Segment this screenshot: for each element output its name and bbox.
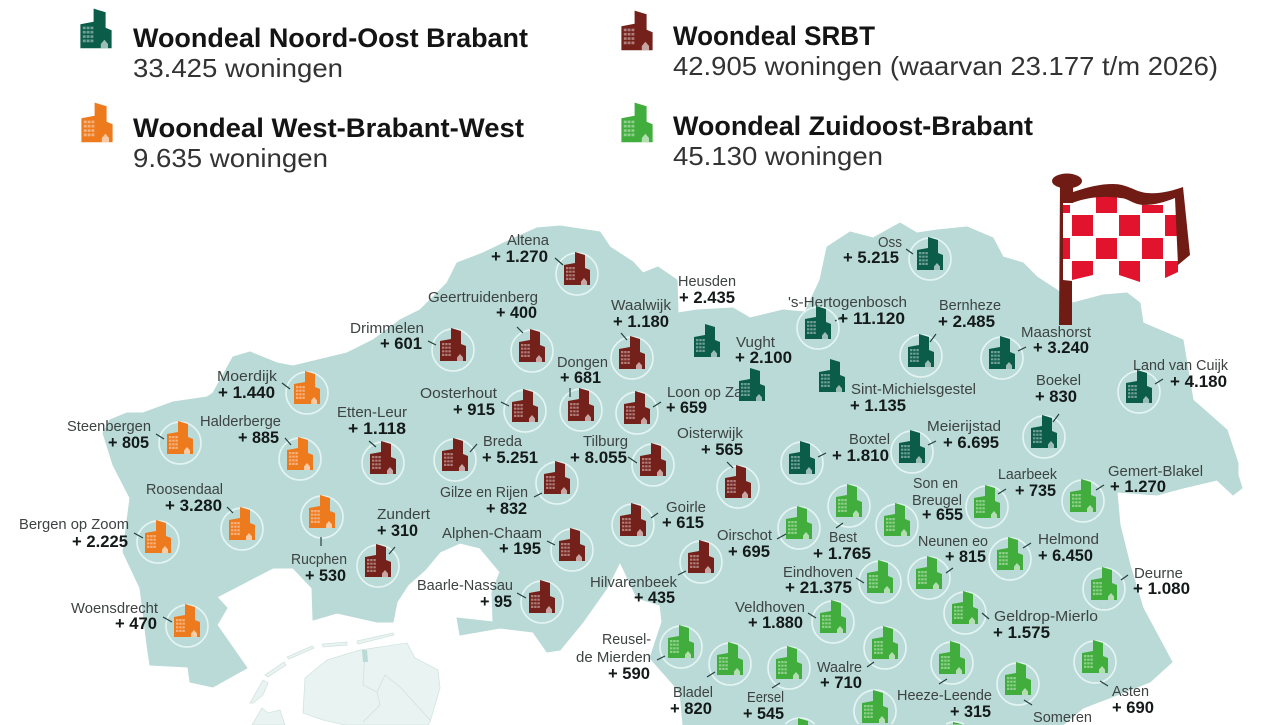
icon: Etten-Leur xyxy=(362,441,404,484)
icon: Rucphen xyxy=(301,495,343,538)
label: Oirschot: + 695 xyxy=(728,543,770,561)
label: Altena xyxy=(491,233,550,266)
label: 's-Hertogenbosch: + 11.120 xyxy=(838,310,905,328)
municipality: Meierijstad xyxy=(891,419,1001,473)
label: Heusden: + 2.435 xyxy=(679,289,735,307)
label: Gemert-Blakel xyxy=(1108,464,1203,496)
label: Laarbeek: + 735 xyxy=(1015,482,1056,500)
label: Oss: Oss xyxy=(878,235,902,251)
icon: Meierijstad xyxy=(891,430,933,473)
municipality: Land van Cuijk xyxy=(1118,358,1229,413)
municipality: Geldrop-Mierlo xyxy=(944,591,1098,642)
municipality: Bernheze xyxy=(900,298,1001,377)
label: Maashorst: Maashorst xyxy=(1021,325,1091,341)
label: Heeze-Leende: + 315 xyxy=(950,703,991,721)
label: Laarbeek xyxy=(998,467,1058,500)
municipality: Drimmelen xyxy=(350,321,474,371)
icon: Moerdijk xyxy=(286,371,328,414)
icon: Zuidoost-Brabant building xyxy=(621,103,653,142)
municipality: Vught xyxy=(735,335,792,401)
icon: Eindhoven xyxy=(859,560,901,603)
icon: Oirschot xyxy=(778,506,820,549)
icon: Laarbeek xyxy=(966,485,1008,528)
municipality: Zundert xyxy=(357,507,430,587)
municipality: Woensdrecht xyxy=(71,601,208,647)
legend: Woondeal Noord-Oost Brabant: 33.425 woningen xyxy=(133,53,343,83)
icon: 's-Hertogenbosch xyxy=(797,306,839,349)
municipality: Geertruidenberg xyxy=(428,290,553,372)
municipality: Gemert-Blakel xyxy=(1062,464,1203,522)
label: Helmond: + 6.450 xyxy=(1038,547,1093,565)
icon: Roosendaal xyxy=(221,507,263,550)
label: Etten-Leur: + 1.118 xyxy=(348,420,406,438)
label: Deurne: + 1.080 xyxy=(1133,580,1190,598)
label: Vught xyxy=(735,335,792,367)
municipality: Oirschot xyxy=(717,506,820,561)
legend: Woondeal SRBT xyxy=(621,11,1218,81)
label: Helmond: Helmond xyxy=(1038,532,1099,548)
label: Rucphen: + 530 xyxy=(305,567,346,585)
municipality: Goirle xyxy=(612,500,706,546)
label: Roosendaal xyxy=(146,482,223,515)
label: Vught: Vught xyxy=(736,335,775,351)
label: Bergen op Zoom: + 2.225 xyxy=(72,533,128,551)
label: Maashorst: + 3.240 xyxy=(1033,339,1089,357)
icon: Bernheze xyxy=(900,334,942,377)
icon: Bladel xyxy=(709,642,751,685)
icon: Oisterwijk xyxy=(717,465,759,508)
label: Loon op Zand xyxy=(666,385,759,417)
label: Son en Breugel: Breugel xyxy=(912,493,962,509)
label: Alphen-Chaam: + 195 xyxy=(499,540,541,558)
icon: Heusden xyxy=(694,324,720,357)
label: Neunen eo: Neunen eo xyxy=(918,534,988,550)
label: Oirschot: Oirschot xyxy=(717,528,772,544)
municipality: Oosterhout xyxy=(420,386,546,432)
label: Baarle-Nassau: Baarle-Nassau xyxy=(417,578,513,594)
icon: Altena xyxy=(556,252,598,295)
label: Geertruidenberg: Geertruidenberg xyxy=(428,290,538,306)
icon: Noord-Oost Brabant building xyxy=(80,9,112,48)
label: Boekel xyxy=(1035,373,1081,406)
municipality: Loon op Zand xyxy=(616,385,759,434)
label: Rucphen xyxy=(291,552,347,585)
icon: Waalre xyxy=(864,626,906,669)
municipality: Roosendaal xyxy=(146,482,263,550)
municipality: Gilze en Rijen xyxy=(440,461,578,518)
label: Oisterwijk: Oisterwijk xyxy=(677,426,744,442)
label: Drimmelen: Drimmelen xyxy=(350,321,424,337)
label: Geldrop-Mierlo xyxy=(993,609,1098,642)
icon: Halderberge xyxy=(279,437,321,480)
municipality: Deurne xyxy=(1083,566,1190,610)
label: Neunen eo xyxy=(918,534,988,566)
label: Breda: Breda xyxy=(483,434,523,450)
label: Bladel: Bladel xyxy=(673,685,713,701)
municipality: Heeze-Leende xyxy=(897,641,992,721)
label: Zundert: + 310 xyxy=(377,522,418,540)
label: Oisterwijk xyxy=(677,426,744,459)
label: Gilze en Rijen: Gilze en Rijen xyxy=(440,485,528,501)
label: Meierijstad xyxy=(927,419,1001,452)
label: Alphen-Chaam xyxy=(442,526,542,558)
label: Sint-Michielsgestel: + 1.135 xyxy=(850,397,906,415)
label: Tilburg: + 8.055 xyxy=(570,449,627,467)
municipality: Baarle-Nassau xyxy=(417,578,563,623)
municipality: Helmond xyxy=(989,532,1099,580)
icon: Reusel-de Mierden xyxy=(660,625,702,668)
icon: Breda xyxy=(434,438,476,481)
municipality: Oss xyxy=(843,235,951,280)
label: Heusden xyxy=(678,274,736,307)
label: Eersel: + 545 xyxy=(743,705,784,723)
municipality: Asten xyxy=(1074,640,1154,717)
label: Reusel-de Mierden: de Mierden xyxy=(576,650,651,666)
label: Land van Cuijk: + 4.180 xyxy=(1170,373,1227,391)
label: Goirle: Goirle xyxy=(666,500,706,516)
label: Woensdrecht xyxy=(71,601,158,633)
label: Meierijstad: + 6.695 xyxy=(943,434,999,452)
municipality: Bladel xyxy=(670,642,751,718)
legend: Woondeal Zuidoost-Brabant: Woondeal Zuidoost-Brabant xyxy=(673,111,1033,141)
icon: Eersel xyxy=(768,646,810,689)
icon: Brabant flag xyxy=(1052,174,1190,325)
label: Alphen-Chaam: Alphen-Chaam xyxy=(442,526,542,542)
label: Goirle: + 615 xyxy=(662,514,704,532)
municipality: Eindhoven xyxy=(783,560,901,603)
label: Asten xyxy=(1112,684,1154,717)
icon: Bergen op Zoom xyxy=(137,520,179,563)
label: Moerdijk: Moerdijk xyxy=(217,369,278,385)
icon: Son en Breugel xyxy=(876,503,918,546)
legend: Woondeal SRBT: Woondeal SRBT xyxy=(673,21,875,51)
label: Waalwijk xyxy=(611,298,672,331)
label: Hilvarenbeek: Hilvarenbeek xyxy=(590,575,678,591)
label: Maashorst xyxy=(1021,325,1091,357)
label: Roosendaal: + 3.280 xyxy=(165,497,222,515)
label: Loon op Zand: + 659 xyxy=(666,399,707,417)
label: Reusel-de Mierden xyxy=(576,632,651,683)
municipality: Altena xyxy=(491,233,598,295)
label: Eindhoven xyxy=(783,565,853,597)
label: Breda xyxy=(482,434,538,467)
label: Gilze en Rijen: + 832 xyxy=(486,500,527,518)
label: Dongen xyxy=(557,355,608,387)
label: Moerdijk xyxy=(217,369,278,402)
label: Son en Breugel: + 655 xyxy=(922,506,963,524)
label: Gemert-Blakel: + 1.270 xyxy=(1110,478,1166,496)
label: Waalwijk: Waalwijk xyxy=(611,298,672,314)
label: Land van Cuijk xyxy=(1133,358,1229,391)
label: Etten-Leur: Etten-Leur xyxy=(337,405,407,421)
icon: Geldrop-Mierlo xyxy=(944,591,986,634)
label: Woensdrecht: Woensdrecht xyxy=(71,601,158,617)
label: Boxtel: Boxtel xyxy=(849,432,890,448)
label: Altena: Altena xyxy=(507,233,550,249)
municipality: Maashorst xyxy=(981,325,1091,379)
label: Asten: Asten xyxy=(1112,684,1149,700)
icon: Maashorst xyxy=(981,336,1023,379)
legend: Woondeal Zuidoost-Brabant: 45.130 woningen xyxy=(673,141,883,171)
label: Bladel: + 820 xyxy=(670,700,712,718)
icon: Steenbergen xyxy=(159,421,201,464)
municipality: Waalre xyxy=(817,626,906,692)
label: Roosendaal: Roosendaal xyxy=(146,482,223,498)
municipality: Waalwijk xyxy=(611,298,672,379)
label: Geldrop-Mierlo: + 1.575 xyxy=(993,624,1050,642)
municipality: Rucphen xyxy=(291,495,347,585)
municipality: Laarbeek xyxy=(966,467,1058,528)
label: Oss xyxy=(843,235,902,267)
label: Baarle-Nassau: + 95 xyxy=(480,593,512,611)
icon: Land van Cuijk xyxy=(1118,370,1160,413)
legend: Woondeal Noord-Oost Brabant: Woondeal Noord-Oost Brabant xyxy=(133,23,528,53)
icon: Boekel xyxy=(1023,415,1065,458)
label: Asten: + 690 xyxy=(1112,699,1154,717)
label: Best: + 1.765 xyxy=(813,545,871,563)
icon: Asten xyxy=(1074,640,1116,683)
label: Bernheze xyxy=(938,298,1001,331)
icon: Tilburg xyxy=(632,443,674,486)
label: Deurne: Deurne xyxy=(1134,566,1183,582)
label: Deurne xyxy=(1133,566,1190,598)
municipality: Eersel xyxy=(743,646,810,723)
label: Waalre: + 710 xyxy=(820,674,862,692)
icon: Heeze-Leende xyxy=(931,641,973,684)
label: Halderberge: Halderberge xyxy=(200,414,281,430)
label: Oisterwijk: + 565 xyxy=(701,441,743,459)
label: Veldhoven xyxy=(735,600,805,632)
icon: Someren xyxy=(997,662,1039,705)
label: 's-Hertogenbosch: 's-Hertogenbosch xyxy=(788,295,907,311)
label: Heusden: Heusden xyxy=(678,274,736,290)
label: Best xyxy=(813,530,871,563)
label: Laarbeek: Laarbeek xyxy=(998,467,1058,483)
municipality: Tilburg xyxy=(570,434,674,486)
label: Son en Breugel: Son en xyxy=(913,476,958,492)
label: Neunen eo: + 815 xyxy=(945,548,986,566)
label: Bernheze: Bernheze xyxy=(939,298,1001,314)
label: Steenbergen xyxy=(67,419,151,452)
legend: Woondeal West-Brabant-West: Woondeal West-Brabant-West xyxy=(133,113,524,143)
label: Oirschot xyxy=(717,528,772,561)
label: Waalwijk: + 1.180 xyxy=(613,313,669,331)
municipality: Boekel xyxy=(1023,373,1081,458)
label: Oosterhout: + 915 xyxy=(453,401,495,419)
label: Reusel-de Mierden: + 590 xyxy=(608,665,650,683)
label: Drimmelen xyxy=(350,321,424,353)
label: Zundert: Zundert xyxy=(377,507,430,523)
municipality: 's-Hertogenbosch xyxy=(788,295,907,349)
icon: Hilvarenbeek xyxy=(680,540,722,583)
municipality: Halderberge xyxy=(200,414,321,480)
icon: Woensdrecht xyxy=(166,604,208,647)
municipality: Reusel-de Mierden xyxy=(576,625,702,683)
icon: Deurne xyxy=(1083,567,1125,610)
label: Waalre xyxy=(817,660,862,692)
icon: Gilze en Rijen xyxy=(536,461,578,504)
label: Drimmelen: + 601 xyxy=(380,335,422,353)
icon: West-Brabant-West building xyxy=(81,103,113,142)
label: Eindhoven: + 21.375 xyxy=(785,579,852,597)
municipality: Son en Breugel xyxy=(876,476,963,546)
label: Steenbergen: Steenbergen xyxy=(67,419,151,435)
label: Altena: + 1.270 xyxy=(491,248,548,266)
legend: Woondeal Zuidoost-Brabant xyxy=(621,103,1033,171)
icon: Neunen eo xyxy=(908,556,950,599)
icon: Vught xyxy=(739,368,765,401)
label: Bernheze: + 2.485 xyxy=(938,313,995,331)
icon: Loon op Zand xyxy=(616,391,658,434)
inset map: Netherlands xyxy=(250,633,440,725)
label: Sint-Michielsgestel xyxy=(850,382,976,415)
label: Oss: + 5.215 xyxy=(843,249,899,267)
municipality: Someren xyxy=(997,662,1092,725)
label: Tilburg: Tilburg xyxy=(583,434,628,450)
icon: Baarle-Nassau xyxy=(521,580,563,623)
icon: Drimmelen xyxy=(432,328,474,371)
label: Oosterhout xyxy=(420,386,497,419)
legend: Woondeal West-Brabant-West xyxy=(81,103,524,173)
label: Rucphen: Rucphen xyxy=(291,552,347,568)
label: Eersel xyxy=(743,690,784,723)
municipality: Dongen xyxy=(557,355,608,431)
label: Hilvarenbeek xyxy=(590,575,678,607)
label: Waalre: Waalre xyxy=(817,660,862,676)
label: Moerdijk: + 1.440 xyxy=(218,384,275,402)
label: Geldrop-Mierlo: Geldrop-Mierlo xyxy=(994,609,1098,625)
label: Dongen: Dongen xyxy=(557,355,608,371)
label: Zundert xyxy=(377,507,430,540)
label: Hilvarenbeek: + 435 xyxy=(634,589,675,607)
municipality: Boxtel xyxy=(781,432,890,484)
label: Reusel-de Mierden: Reusel- xyxy=(602,632,651,648)
label: Dongen: + 681 xyxy=(560,369,601,387)
label: Halderberge xyxy=(200,414,281,447)
label: Best: Best xyxy=(829,530,857,546)
label: Boxtel: + 1.810 xyxy=(832,447,889,465)
label: Bladel xyxy=(670,685,713,718)
icon: Dongen xyxy=(560,388,602,431)
icon: partial municipality at lower edge left xyxy=(785,718,815,725)
municipality: Steenbergen xyxy=(67,419,201,464)
icon: Goirle xyxy=(612,503,654,546)
label: Helmond xyxy=(1038,532,1099,565)
label: Etten-Leur xyxy=(337,405,407,438)
label: Sint-Michielsgestel: Sint-Michielsgestel xyxy=(851,382,976,398)
icon: Oosterhout xyxy=(504,389,546,432)
label: Oosterhout: Oosterhout xyxy=(420,386,497,402)
icon: Waalwijk xyxy=(611,336,653,379)
label: Boekel: Boekel xyxy=(1036,373,1081,389)
label: Goirle xyxy=(662,500,706,532)
label: Veldhoven: + 1.880 xyxy=(748,614,803,632)
municipality: Oisterwijk xyxy=(677,426,759,508)
label: Land van Cuijk: Land van Cuijk xyxy=(1133,358,1229,374)
icon: unnamed municipality near Waalre xyxy=(854,690,896,724)
municipality: Bergen op Zoom xyxy=(19,517,179,563)
label: Breda: + 5.251 xyxy=(482,449,538,467)
municipality: Alphen-Chaam xyxy=(442,526,593,571)
icon: Veldhoven xyxy=(812,600,854,643)
municipality: Etten-Leur xyxy=(337,405,407,484)
icon: Alphen-Chaam xyxy=(551,528,593,571)
icon: Gemert-Blakel xyxy=(1062,479,1104,522)
legend: Woondeal Noord-Oost Brabant xyxy=(80,9,528,83)
map: Noord-Brabant xyxy=(103,223,1242,725)
municipality: Moerdijk xyxy=(217,369,328,414)
label: Meierijstad: Meierijstad xyxy=(927,419,1001,435)
label: Gilze en Rijen xyxy=(440,485,528,518)
label: Boekel: + 830 xyxy=(1035,388,1077,406)
label: 's-Hertogenbosch xyxy=(788,295,907,328)
legend: Woondeal West-Brabant-West: 9.635 woningen xyxy=(133,143,328,173)
municipality: Heusden xyxy=(678,274,736,357)
icon: Zundert xyxy=(357,544,399,587)
icon: Sint-Michielsgestel xyxy=(819,359,845,392)
label: Tilburg xyxy=(570,434,628,467)
icon: Boxtel xyxy=(781,441,823,484)
label: Heeze-Leende xyxy=(897,688,992,721)
municipality: Best xyxy=(813,484,871,563)
icon: Oss xyxy=(909,237,951,280)
label: Eindhoven: Eindhoven xyxy=(783,565,853,581)
icon: Helmond xyxy=(989,537,1031,580)
label: Loon op Zand: Loon op Zand xyxy=(667,385,759,401)
label: Baarle-Nassau xyxy=(417,578,513,611)
municipality: Veldhoven xyxy=(735,600,854,643)
icon: SRBT building xyxy=(621,11,653,50)
label: Son en Breugel xyxy=(912,476,963,524)
label: Eersel: Eersel xyxy=(747,690,784,706)
icon: Best xyxy=(828,484,870,527)
label: Bergen op Zoom: Bergen op Zoom xyxy=(19,517,129,533)
municipality: Hilvarenbeek xyxy=(590,540,722,607)
municipality: Breda xyxy=(434,434,538,481)
icon: Geertruidenberg xyxy=(511,329,553,372)
label: Halderberge: + 885 xyxy=(238,429,279,447)
label: Heeze-Leende: Heeze-Leende xyxy=(897,688,992,704)
municipality: Sint-Michielsgestel xyxy=(819,359,976,415)
label: Geertruidenberg: + 400 xyxy=(496,304,537,322)
label: Bergen op Zoom xyxy=(19,517,129,551)
municipality: Neunen eo xyxy=(908,534,988,599)
label: Veldhoven: Veldhoven xyxy=(735,600,805,616)
label: Woensdrecht: + 470 xyxy=(115,615,157,633)
label: Gemert-Blakel: Gemert-Blakel xyxy=(1108,464,1203,480)
label: Geertruidenberg xyxy=(428,290,538,322)
icon: partial municipality at lower edge right xyxy=(946,722,964,724)
label: Steenbergen: + 805 xyxy=(108,434,149,452)
label: Boxtel xyxy=(832,432,890,465)
label: Vught: + 2.100 xyxy=(735,349,792,367)
legend: Woondeal SRBT: 42.905 woningen (waarvan 23.177 t/m 2026) xyxy=(673,51,1218,81)
